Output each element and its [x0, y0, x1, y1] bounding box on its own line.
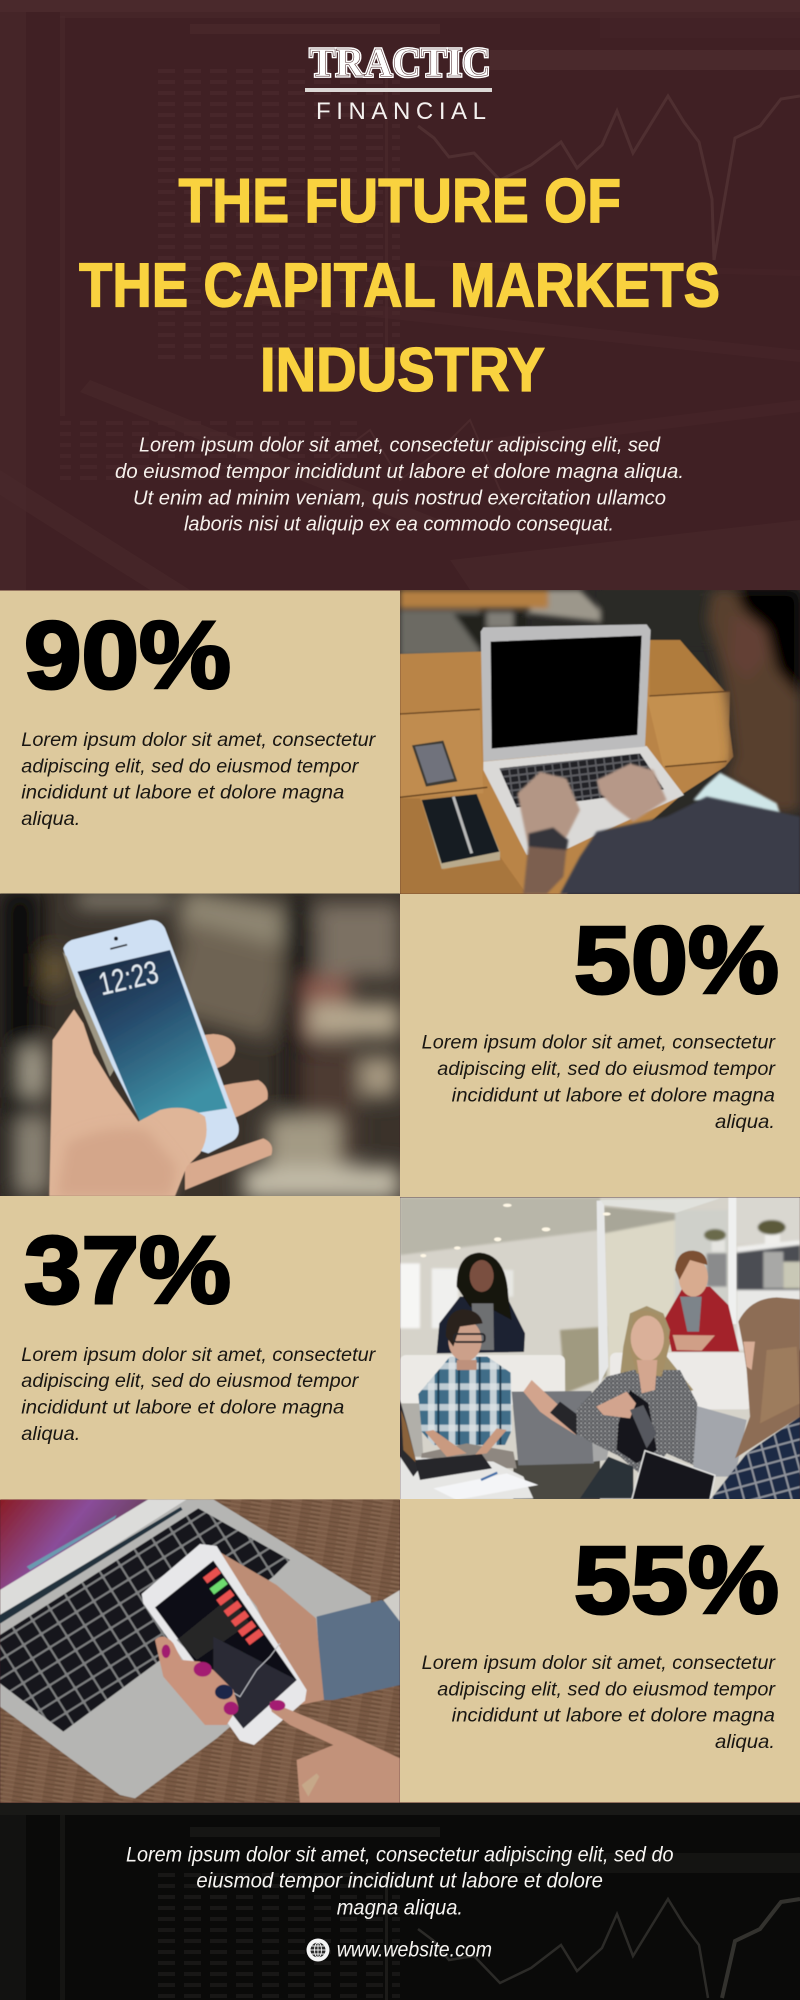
stat description: adipiscing elit, sed do eiusmod tempor: [437, 1678, 777, 1700]
phone on desk: [412, 741, 457, 787]
stat number 37%: 37%: [24, 1217, 231, 1324]
man head and shoulder: [707, 590, 800, 813]
typing hands: [517, 763, 667, 894]
stat description: aliqua.: [715, 1111, 775, 1133]
holding hand: [49, 1009, 272, 1196]
title: THE CAPITAL MARKETS: [79, 252, 720, 320]
stat description: adipiscing elit, sed do eiusmod tempor: [21, 755, 360, 777]
smartphone: 12:23: [95, 954, 162, 1002]
laptop: [481, 624, 684, 855]
stat description: [422, 1032, 777, 1133]
stat description: [21, 1344, 377, 1445]
pointing hand: [269, 1700, 400, 1803]
intro text: Ut enim ad minim veniam, quis nostrud exercitation ullamco: [133, 487, 666, 509]
intro text: Lorem ipsum dolor sit amet, consectetur adipiscing elit, sed: [139, 435, 661, 457]
stat description: incididunt ut labore et dolore magna: [452, 1705, 775, 1727]
logo: Tractic Financial: [305, 39, 492, 125]
footer text: eiusmod tempor incididunt ut labore et dolore: [196, 1870, 603, 1893]
logo wordmark: TRACTIC: [310, 39, 490, 85]
icon: globe: [306, 1938, 330, 1962]
intro text: laboris nisi ut aliquip ex ea commodo consequat.: [184, 513, 614, 535]
intro text: [115, 435, 684, 535]
title: [79, 167, 720, 405]
standing man in red: [665, 1251, 739, 1352]
logo subtitle: FINANCIAL: [316, 98, 486, 125]
stat description: adipiscing elit, sed do eiusmod tempor: [437, 1058, 777, 1080]
panel: footer background: [0, 1803, 800, 2000]
panel: 37% stat: [0, 1196, 400, 1500]
fingers behind phone: [204, 1033, 269, 1118]
footer text: [126, 1844, 674, 1920]
foreground woman: [710, 1297, 800, 1500]
stat description: [422, 1652, 777, 1753]
smartphone with stock app: [142, 1544, 307, 1745]
tablet: [632, 1451, 715, 1500]
notebook and pen: [422, 794, 500, 869]
sofa: [400, 1353, 752, 1500]
panel: header background: [0, 0, 800, 590]
wrist and sleeve: [213, 1548, 400, 1705]
stat description: aliqua.: [21, 808, 80, 830]
stat number 90%: 90%: [24, 602, 231, 709]
stat description: adipiscing elit, sed do eiusmod tempor: [21, 1370, 360, 1392]
stat description: aliqua.: [715, 1731, 775, 1753]
stat number 55%: 55%: [574, 1527, 779, 1634]
stat description: incididunt ut labore et dolore magna: [452, 1085, 775, 1107]
stat number 50%: 50%: [574, 907, 779, 1014]
panel: 50% stat: [400, 894, 800, 1197]
website url: www.website.com: [337, 1939, 492, 1962]
stat description: aliqua.: [21, 1423, 80, 1445]
footer text: Lorem ipsum dolor sit amet, consectetur adipiscing elit, sed do: [126, 1844, 674, 1867]
smartphone: [63, 920, 239, 1153]
panel: 90% stat: [0, 590, 400, 894]
photo: hand holding smartphone: [0, 889, 400, 1200]
intro text: do eiusmod tempor incididunt ut labore et dolore magna aliqua.: [115, 461, 684, 483]
stat description: Lorem ipsum dolor sit amet, consectetur: [21, 729, 377, 751]
stat description: [21, 729, 377, 830]
photo: man typing on laptop: [400, 590, 800, 894]
stat description: incididunt ut labore et dolore magna: [21, 782, 344, 804]
laptop and keyboard: [0, 1499, 371, 1798]
stat description: Lorem ipsum dolor sit amet, consectetur: [21, 1344, 377, 1366]
title: INDUSTRY: [260, 336, 545, 405]
photo: stock app on phone over laptop: [0, 1490, 400, 1810]
holding fingers with painted nails: [155, 1637, 238, 1725]
stat description: Lorem ipsum dolor sit amet, consectetur: [422, 1032, 777, 1054]
title: THE FUTURE OF: [178, 167, 621, 236]
logo wordmark: TRACTIC: [310, 39, 490, 85]
stat description: Lorem ipsum dolor sit amet, consectetur: [422, 1652, 777, 1674]
footer text: magna aliqua.: [337, 1897, 463, 1920]
seated man in plaid shirt: [418, 1309, 517, 1468]
seated woman talking: [523, 1306, 697, 1498]
stat description: incididunt ut labore et dolore magna: [21, 1397, 344, 1419]
table with laptop and papers: [400, 1400, 538, 1500]
panel: 55% stat: [400, 1499, 800, 1803]
standing woman: [437, 1253, 525, 1353]
photo: team meeting in office: [400, 1190, 800, 1500]
